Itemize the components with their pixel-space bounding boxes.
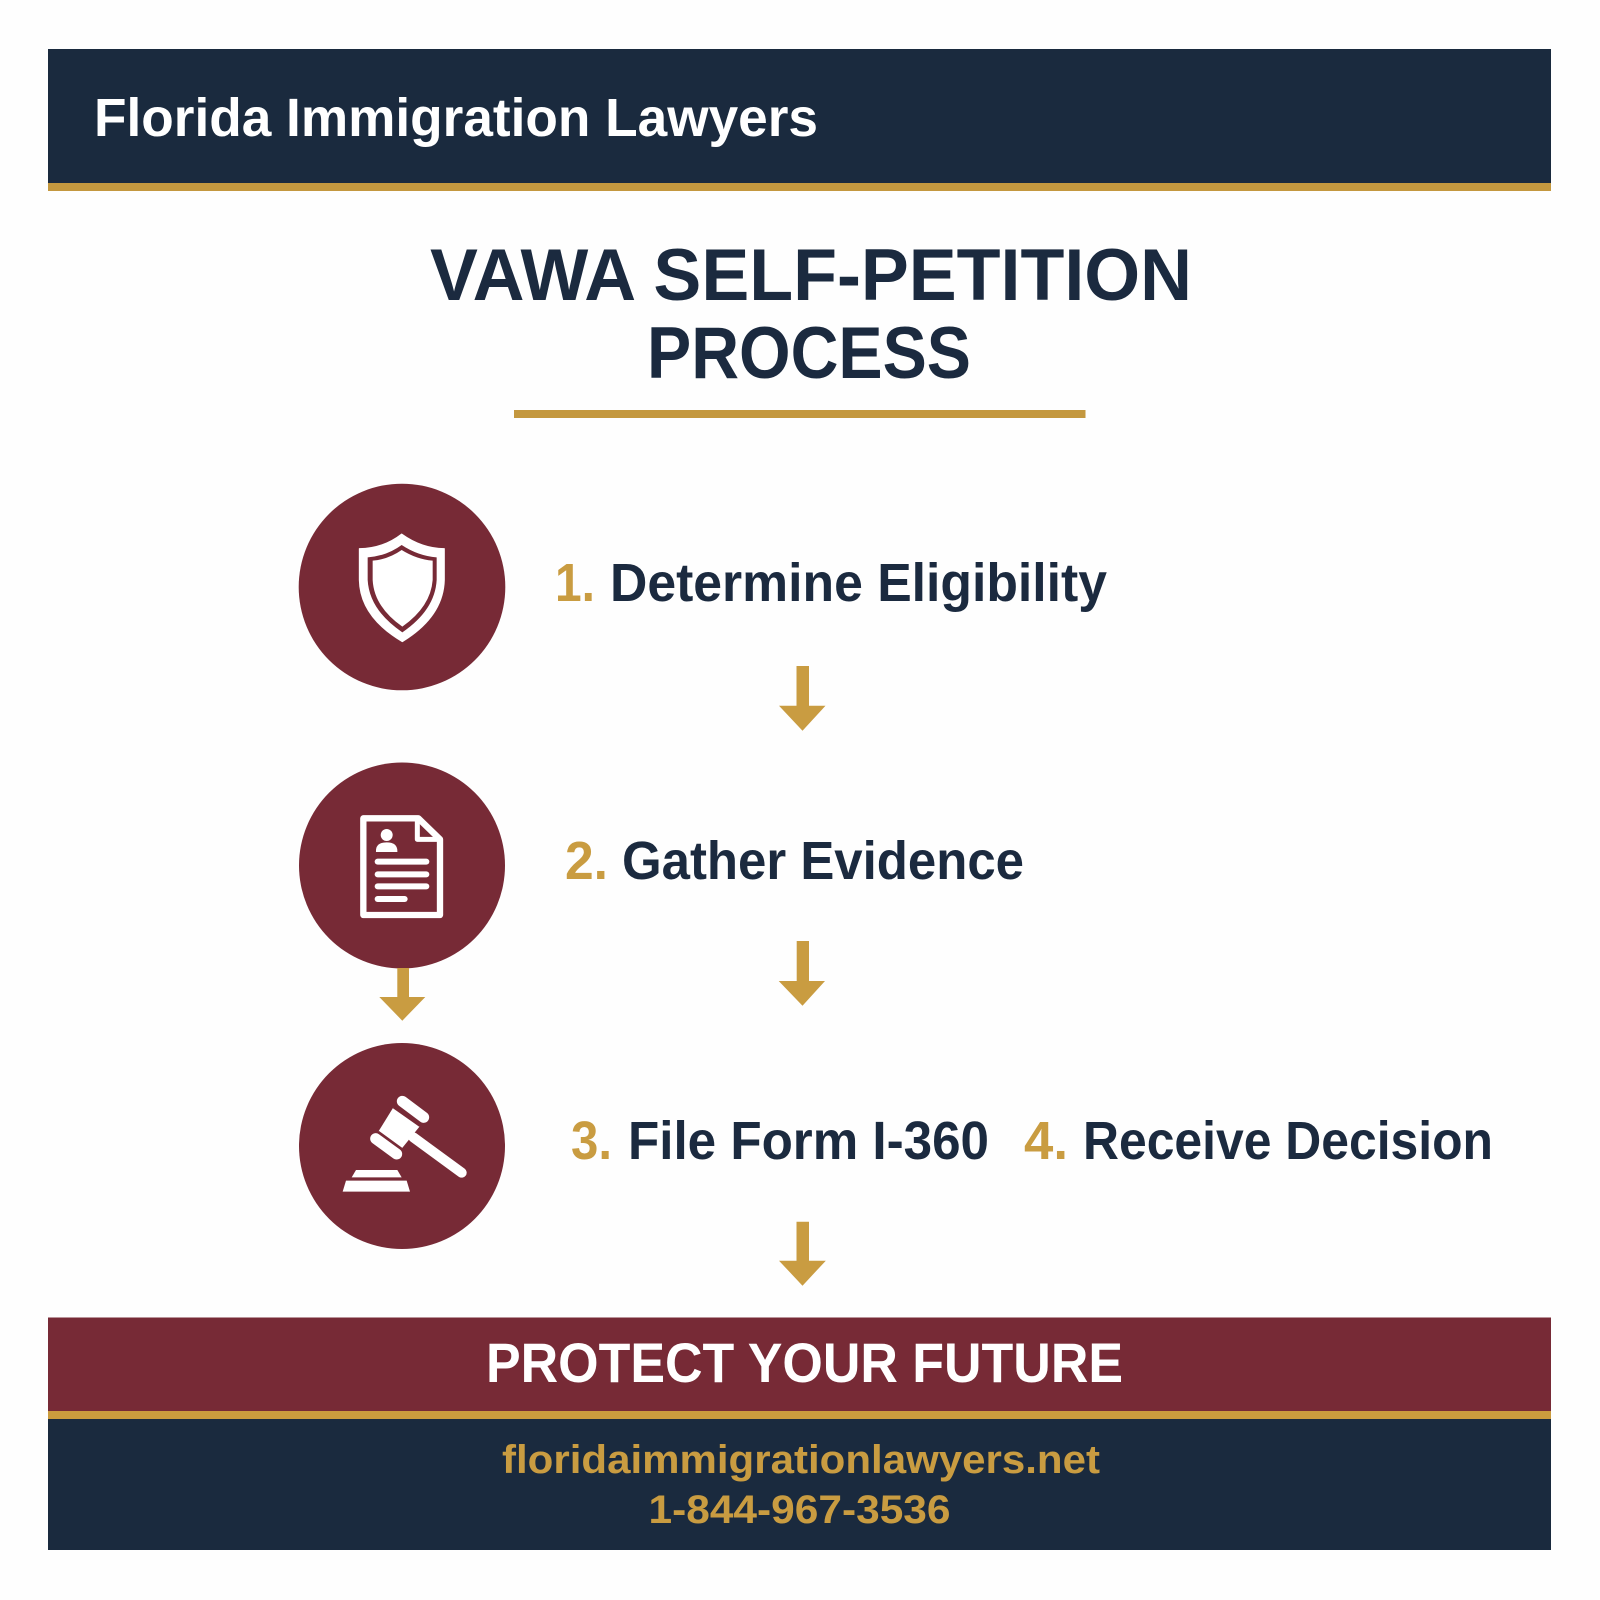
step 3 label: 3.	[571, 1111, 612, 1171]
panel: top header	[48, 49, 1551, 191]
step 4 label: 4.	[1024, 1111, 1068, 1171]
phone number: 1-844-967-3536	[648, 1488, 950, 1532]
icon: shield circle	[299, 484, 505, 690]
step 2 label: Gather Evidence	[622, 831, 1024, 891]
step 3 label: File Form I-360	[628, 1111, 989, 1171]
header brand name: Florida Immigration Lawyers	[94, 88, 818, 148]
heading: title: VAWA SELF-PETITION	[430, 235, 1192, 316]
banner text: PROTECT YOUR FUTURE	[486, 1331, 1123, 1394]
icon: document circle	[299, 762, 505, 968]
website: floridaimmigrationlawyers.net	[502, 1438, 1100, 1482]
step 4 label: Receive Decision	[1083, 1111, 1493, 1171]
step 1 label: 1.	[555, 553, 595, 613]
heading: title: PROCESS	[647, 313, 971, 394]
arrow: under document circle	[379, 968, 425, 1021]
arrow: step 2 to step 3	[779, 941, 825, 1006]
step 1 label: Determine Eligibility	[610, 553, 1107, 613]
title underline	[514, 410, 1086, 418]
heading: title	[430, 235, 1192, 394]
step 2 label: 2.	[565, 831, 608, 891]
icon: gavel circle	[299, 1043, 505, 1249]
arrow: step 1 to step 2	[779, 666, 826, 731]
panel: call to action banner	[48, 1318, 1551, 1411]
arrow: step 3 to banner	[779, 1222, 826, 1286]
panel: contact footer	[48, 1419, 1551, 1550]
banner divider	[48, 1411, 1551, 1419]
